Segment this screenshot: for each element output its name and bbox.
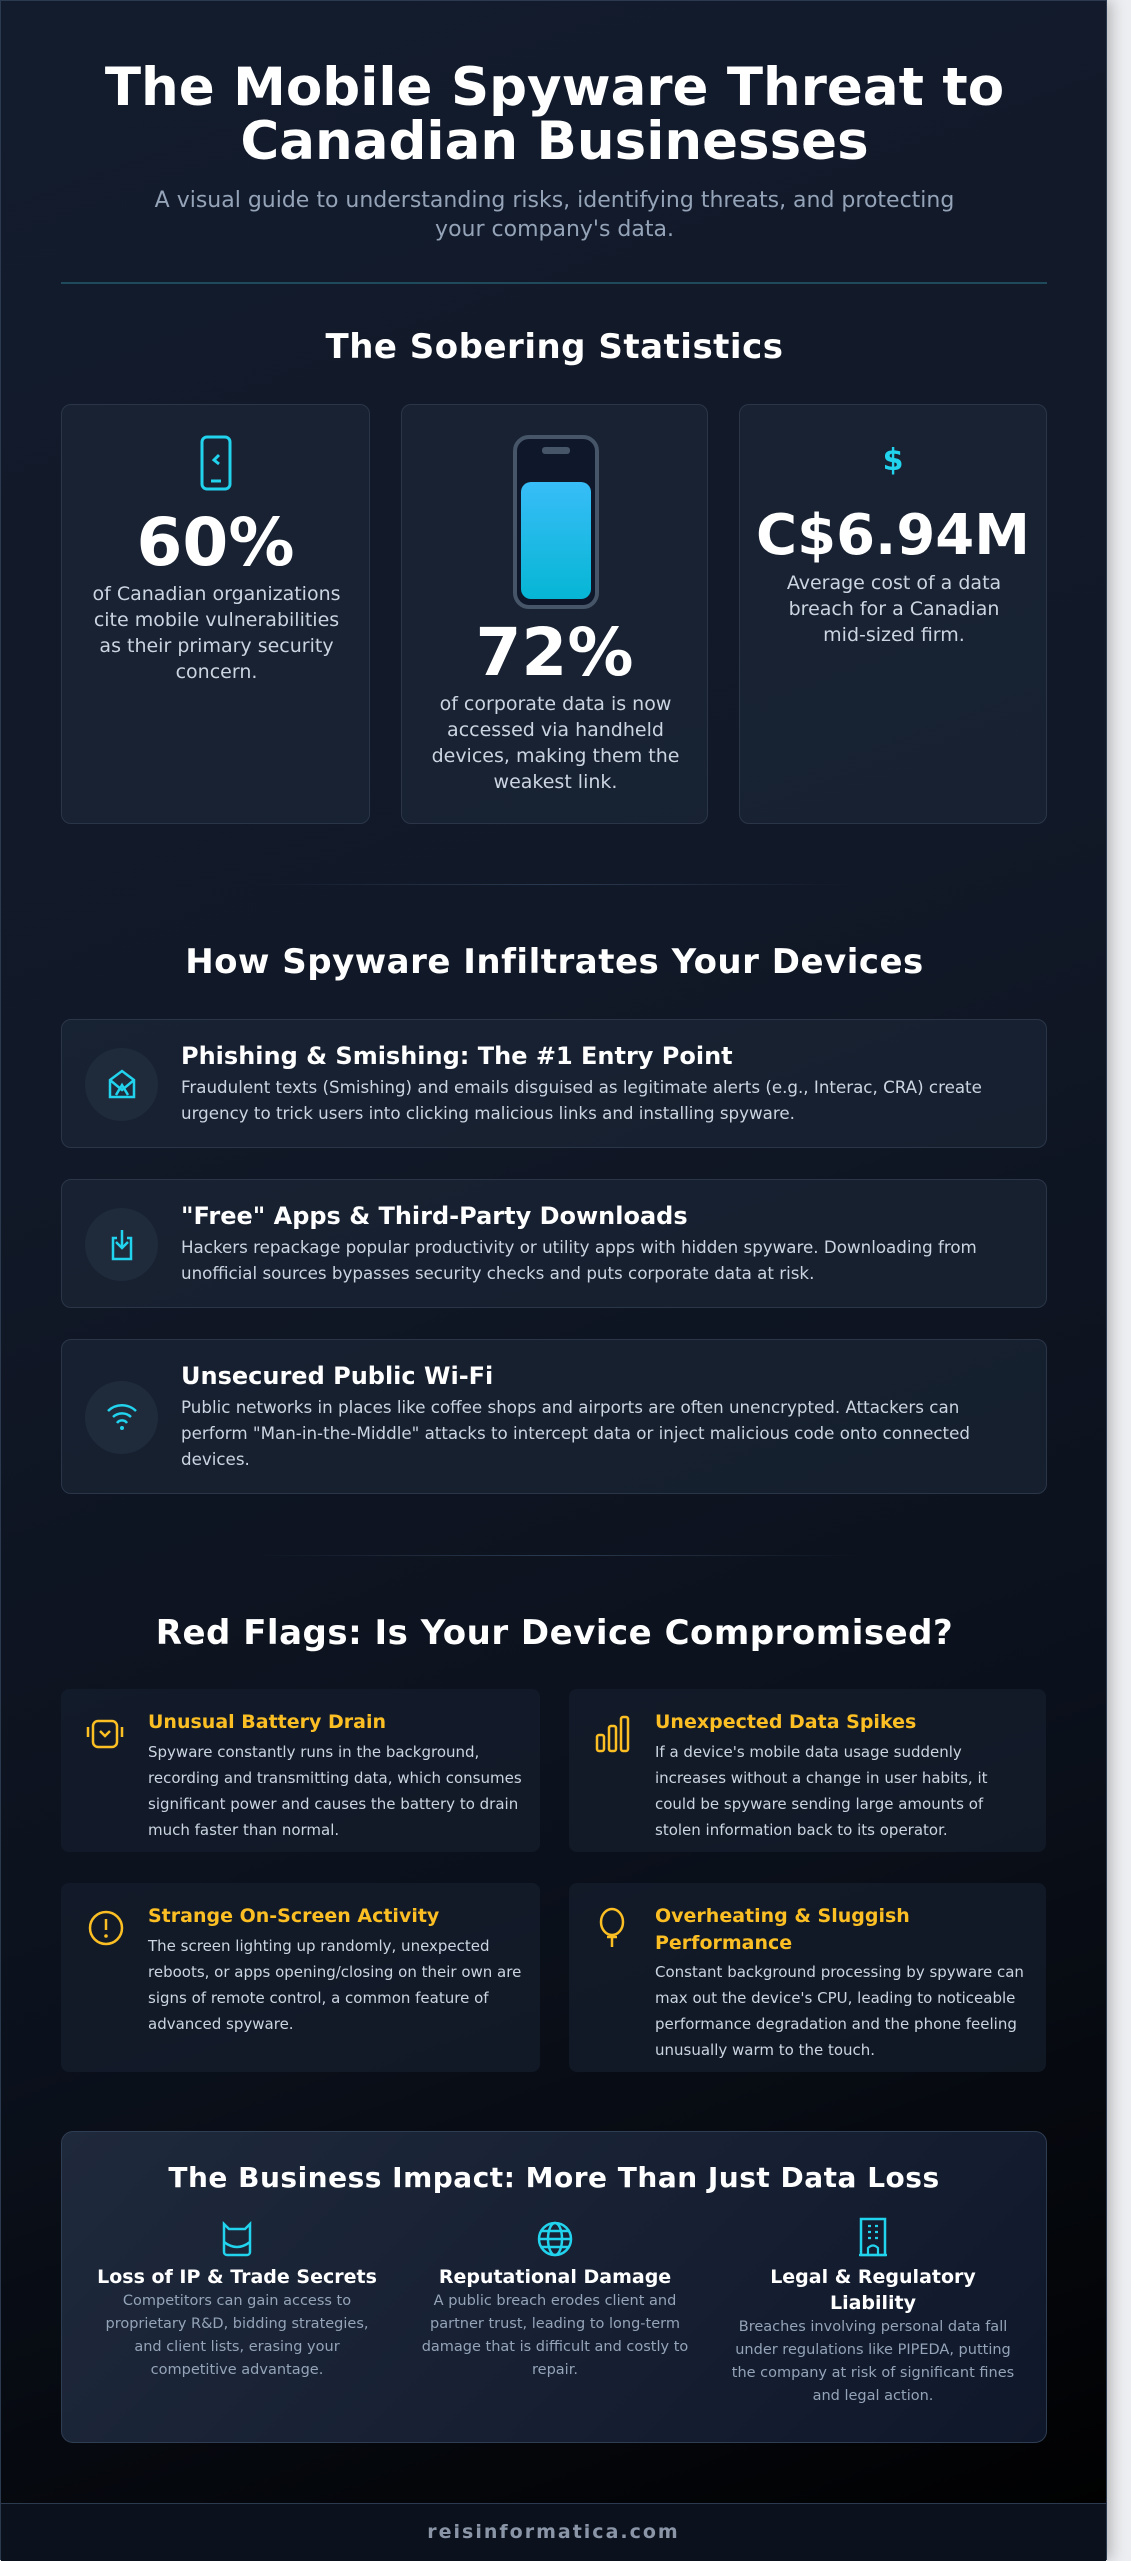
icon: battery <box>86 1720 124 1748</box>
flag description: Spyware constantly runs in the background, recording and transmitting data, which consumes significant power and causes the battery to drain much faster than normal. <box>148 1743 522 1839</box>
threat description: Fraudulent texts (Smishing) and emails disguised as legitimate alerts (e.g., Interac, CRA) create urgency to trick users into clicking malicious links and installing spyware. <box>181 1077 982 1123</box>
stat 60%: 60% <box>136 504 294 581</box>
icon: vault <box>222 2221 252 2256</box>
threat title: "Free" Apps & Third-Party Downloads <box>181 1202 688 1230</box>
threat card: phishing <box>61 1019 1047 1148</box>
flag card: battery <box>61 1689 540 1852</box>
stat card 2 <box>401 404 708 824</box>
threat description: Hackers repackage popular productivity or utility apps with hidden spyware. Downloading from unofficial sources bypasses security checks and puts corporate data at risk. <box>181 1237 977 1283</box>
stat description: of corporate data is now accessed via handheld devices, making them the weakest link. <box>432 693 679 793</box>
heading: infiltration: How Spyware Infiltrates Your Devices <box>185 942 924 982</box>
icon: big phone <box>513 435 599 609</box>
stat card 3 <box>739 404 1047 824</box>
flag card: data spikes <box>569 1689 1046 1852</box>
threat title: Phishing & Smishing: The #1 Entry Point <box>181 1042 733 1070</box>
flag title: Overheating & Sluggish Performance <box>655 1905 910 1954</box>
subtitle: A visual guide to understanding risks, identifying threats, and protecting your company's data. <box>155 188 954 242</box>
icon: alert <box>88 1910 124 1946</box>
impact title: Loss of IP & Trade Secrets <box>97 2266 377 2288</box>
icon: envelope <box>85 1048 158 1121</box>
flag title: Unusual Battery Drain <box>148 1711 386 1733</box>
threat card: wifi <box>61 1339 1047 1494</box>
flag description: Constant background processing by spyware can max out the device's CPU, leading to noticeable performance degradation and the phone feeling unusually warm to the touch. <box>655 1963 1024 2059</box>
title: Canadian Businesses <box>240 111 869 172</box>
impact title: Legal & Regulatory Liability <box>770 2266 976 2314</box>
impact title: Reputational Damage <box>439 2266 671 2288</box>
footer <box>1 2503 1106 2561</box>
threat description: Public networks in places like coffee shops and airports are often unencrypted. Attackers can perform "Man-in-the-Middle" attacks to intercept data or inject malicious code onto connected devices. <box>181 1397 970 1469</box>
icon: globe <box>538 2222 572 2256</box>
panel: business impact <box>61 2131 1047 2443</box>
impact description: Competitors can gain access to proprietary R&D, bidding strategies, and client lists, erasing your competitive advantage. <box>105 2293 368 2378</box>
flag description: If a device's mobile data usage suddenly increases without a change in user habits, it could be spyware sending large amounts of stolen information back to its operator. <box>655 1743 988 1839</box>
flag title: Unexpected Data Spikes <box>655 1711 916 1733</box>
heading: statistics: The Sobering Statistics <box>326 327 783 367</box>
heading: red flags: Red Flags: Is Your Device Compromised? <box>156 1613 953 1653</box>
stat 72%: 72% <box>476 614 633 691</box>
threat card: free apps <box>61 1179 1047 1308</box>
stat description: of Canadian organizations cite mobile vulnerabilities as their primary security concern. <box>92 583 341 683</box>
impact description: Breaches involving personal data fall under regulations like PIPEDA, putting the company at risk of significant fines and legal action. <box>732 2319 1014 2404</box>
icon: bar chart <box>596 1716 630 1752</box>
icon: phone <box>200 436 232 490</box>
stat description: Average cost of a data breach for a Canadian mid-sized firm. <box>787 572 1001 646</box>
impact description: A public breach erodes client and partner trust, leading to long-term damage that is difficult and costly to repair. <box>422 2293 688 2378</box>
flag card: overheating <box>569 1883 1046 2072</box>
impact column: IP <box>97 2221 377 2378</box>
title: The Mobile Spyware Threat to <box>105 57 1004 118</box>
icon: dollar: $ <box>883 443 903 478</box>
title <box>105 57 1004 172</box>
threat title: Unsecured Public Wi-Fi <box>181 1362 493 1390</box>
stat C$6.94M: C$6.94M <box>756 503 1030 568</box>
impact column: reputation <box>422 2222 688 2378</box>
icon: thermometer <box>600 1908 624 1947</box>
flag description: The screen lighting up randomly, unexpected reboots, or apps opening/closing on their own are signs of remote control, a common feature of advanced spyware. <box>148 1937 521 2033</box>
flag card: screen activity <box>61 1883 540 2072</box>
flag title: Strange On-Screen Activity <box>148 1905 439 1927</box>
icon: building <box>859 2218 887 2256</box>
stat card 1 <box>61 404 370 824</box>
footer text: reisinformatica.com <box>427 2521 680 2543</box>
icon: wifi <box>85 1381 158 1454</box>
impact heading: The Business Impact: More Than Just Data Loss <box>168 2161 940 2194</box>
impact column: legal <box>732 2218 1014 2404</box>
icon: download <box>85 1208 158 1281</box>
